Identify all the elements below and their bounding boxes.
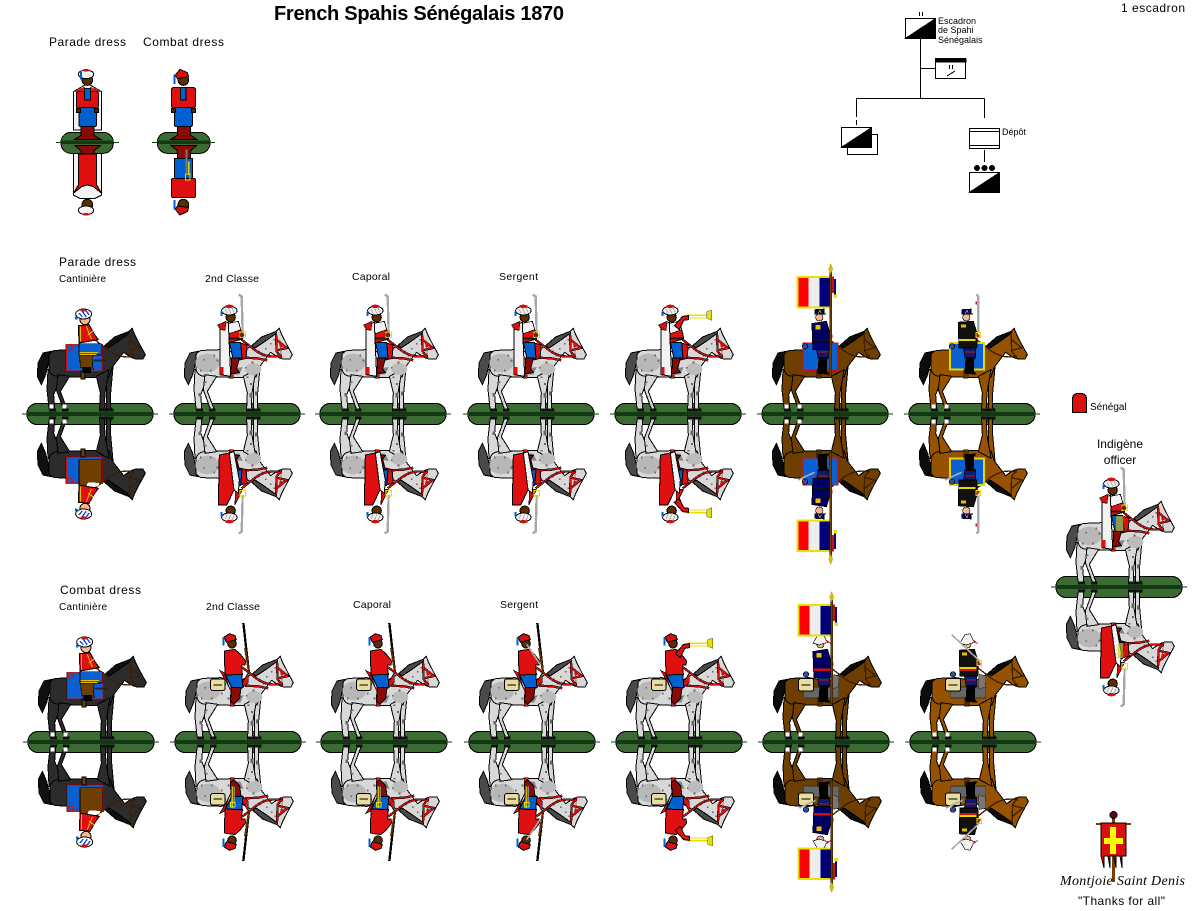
soldier: standard bearer, combat xyxy=(758,592,894,892)
icon: senegal shield xyxy=(1072,394,1086,412)
organization chart xyxy=(842,12,1000,192)
row heading: parade dress: Parade dress xyxy=(59,255,136,269)
soldier: 2nd classe, parade xyxy=(169,295,305,533)
soldier: sergent, parade xyxy=(463,295,599,533)
soldier: trumpeter, parade xyxy=(610,305,746,523)
unit count label: 1 escadron xyxy=(1121,1,1185,15)
unit symbol: headquarters xyxy=(936,58,966,78)
soldier: cantiniere, parade xyxy=(22,309,158,519)
chart label: depot: Dépôt xyxy=(1002,127,1027,137)
chart label: escadron: de Spahi xyxy=(938,25,974,35)
rank label: sergent, combat: Sergent xyxy=(500,599,538,611)
soldier: indigene officer xyxy=(1051,468,1187,706)
unit symbol: squadrons xyxy=(842,128,878,154)
rank label: caporal, combat: Caporal xyxy=(353,599,391,611)
soldier: officer, parade xyxy=(904,294,1040,534)
soldier: officer, combat xyxy=(905,634,1041,850)
top figure heading: combat dress: Combat dress xyxy=(143,35,224,49)
soldier: standard bearer, parade xyxy=(757,264,893,564)
soldier: cantiniere, combat xyxy=(23,637,159,847)
heading: indigene officer: officer xyxy=(1104,453,1136,467)
unit symbol: depot xyxy=(970,128,1000,148)
chart label: escadron: Escadron xyxy=(938,16,976,26)
unit symbol: escadron xyxy=(906,18,936,38)
motto script: Montjoie Saint Denis xyxy=(1059,874,1186,889)
heading: indigene officer: Indigène xyxy=(1097,437,1143,451)
soldier: trumpeter, combat xyxy=(611,634,747,850)
legend label: senegal: Sénégal xyxy=(1090,402,1127,413)
rank label: 2nd classe, parade: 2nd Classe xyxy=(205,273,259,285)
chart connectors xyxy=(856,12,984,162)
figure: combat dress, front and back xyxy=(152,69,215,215)
rank label: cantiniere, parade: Cantinière xyxy=(59,274,106,285)
icon: banner with yellow cross xyxy=(1096,812,1131,882)
row heading: combat dress: Combat dress xyxy=(60,583,141,597)
thanks note: "Thanks for all" xyxy=(1078,894,1165,908)
rank label: cantiniere, combat: Cantinière xyxy=(59,602,107,613)
rank label: sergent, parade: Sergent xyxy=(499,271,538,283)
soldier: 2nd classe, combat xyxy=(170,623,306,861)
soldier: caporal, combat xyxy=(316,623,452,861)
rank label: caporal, parade: Caporal xyxy=(352,271,390,283)
title: French Spahis Sénégalais 1870 xyxy=(274,3,564,25)
unit symbol: platoon xyxy=(970,166,1000,192)
soldier: caporal, parade xyxy=(315,295,451,533)
soldier: sergent, combat xyxy=(464,623,600,861)
chart label: escadron: Sénégalais xyxy=(938,35,983,45)
rank label: 2nd classe, combat: 2nd Classe xyxy=(206,601,260,613)
figure: parade dress, front and back xyxy=(56,69,119,216)
top figure heading: parade dress: Parade dress xyxy=(49,35,126,49)
